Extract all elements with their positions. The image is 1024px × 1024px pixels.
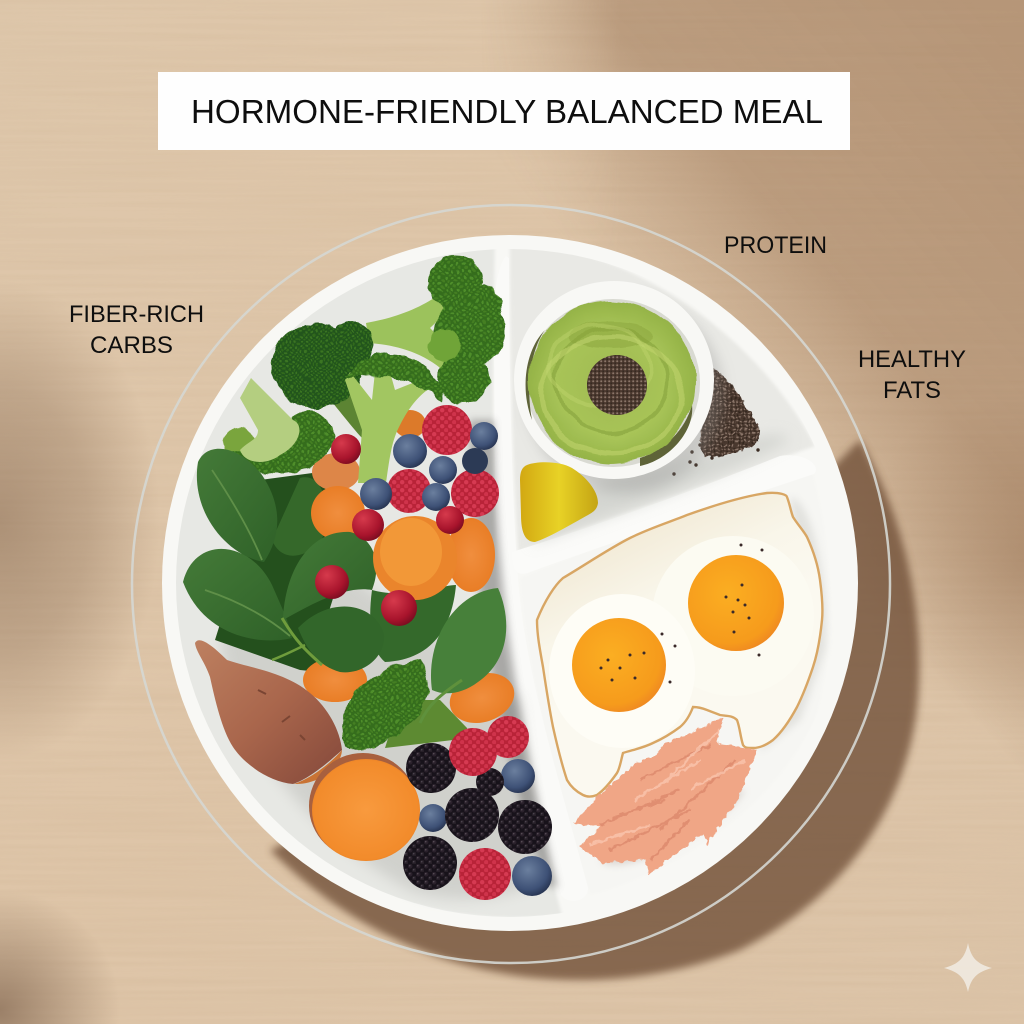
sweet potato slice: [309, 753, 420, 861]
label: fiber-rich carbs: FIBER-RICH: [69, 301, 204, 328]
spinach leaves: [183, 449, 384, 672]
compartment inner shadows: [220, 420, 790, 899]
egg whites: [537, 493, 822, 796]
label: healthy fats: [858, 346, 966, 404]
broccoli top right: [366, 255, 505, 404]
title banner: HORMONE-FRIENDLY BALANCED MEAL: [191, 93, 823, 130]
chia topping: [587, 355, 647, 415]
outer thin ring: [132, 205, 890, 963]
olive oil pool: [520, 462, 598, 542]
label: protein: PROTEIN: [724, 232, 827, 259]
food: protein: [537, 493, 826, 875]
label: fiber-rich carbs: [69, 301, 204, 359]
broccoli back: [271, 322, 374, 438]
plate rim: [162, 235, 858, 931]
food: healthy fats: [514, 281, 760, 542]
avocado ramekin: [514, 281, 714, 479]
title banner: [158, 72, 850, 150]
broccoli bottom: [342, 660, 470, 750]
label: healthy fats: FATS: [883, 377, 941, 404]
ramekin shadow: [527, 297, 723, 493]
blueberries: [360, 422, 552, 896]
carrot slices front: [373, 516, 495, 600]
broccoli left: [223, 378, 334, 473]
sweet potato: [195, 640, 342, 784]
spinach back leaves: [215, 470, 456, 675]
egg yolks: [572, 618, 666, 712]
label: fiber-rich carbs: CARBS: [90, 332, 173, 359]
raspberries: [387, 405, 529, 900]
plate divider vertical: [494, 256, 588, 901]
broccoli centre floret: [345, 354, 443, 483]
cranberries: [315, 434, 464, 626]
icon: sparkle: [944, 943, 992, 992]
carrot slices back: [303, 410, 521, 731]
label: healthy fats: HEALTHY: [858, 346, 966, 373]
chia seed pile: [672, 368, 760, 476]
plate drop shadow: [270, 440, 919, 980]
blackberries: [403, 743, 552, 890]
plate divider branch: [512, 455, 816, 574]
pepper specks: [600, 544, 764, 684]
plate wells: [167, 240, 830, 918]
flaked salmon: [573, 718, 757, 875]
raspberry over blackberries: [449, 728, 497, 776]
food: fiber-rich carbs: [183, 255, 552, 900]
divided white plate: [162, 235, 858, 931]
egg shadow: [760, 497, 826, 752]
front spinach leaf: [420, 588, 506, 723]
